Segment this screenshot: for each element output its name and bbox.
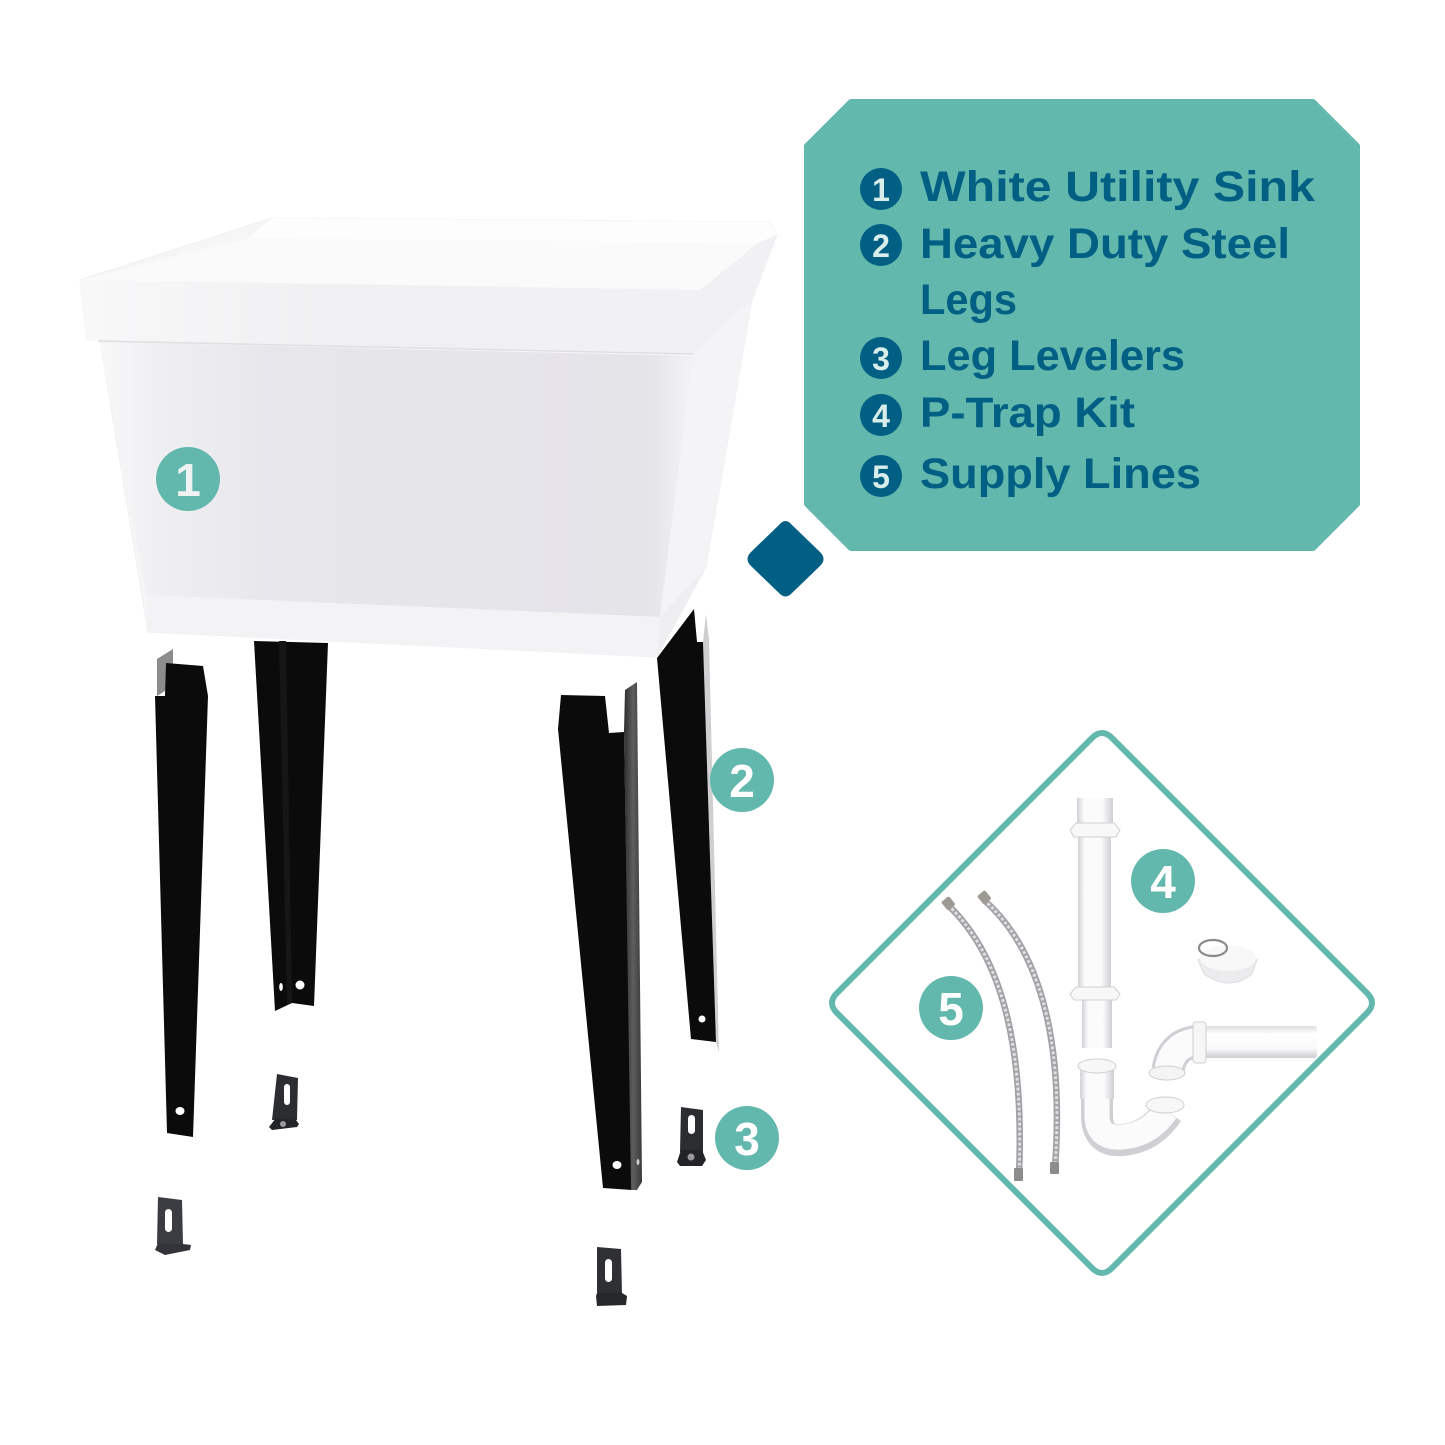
list item 5: Supply Lines bbox=[920, 450, 1201, 498]
list item 2: 2 bbox=[872, 228, 890, 264]
callout badge 2: 2 bbox=[729, 755, 755, 807]
rim shadow line bbox=[98, 341, 694, 354]
sink front face bbox=[100, 342, 693, 617]
list item 3: 3 bbox=[872, 341, 890, 377]
leveler: rear left bbox=[269, 1074, 299, 1130]
p-trap kit bbox=[1070, 798, 1317, 1140]
panel: parts list bbox=[807, 102, 1357, 548]
white utility sink bbox=[80, 218, 777, 657]
callout badge 3 bbox=[715, 1106, 779, 1170]
sink outer silhouette bbox=[80, 218, 777, 657]
callout badge 3: 3 bbox=[734, 1113, 760, 1165]
callout badge 1: 1 bbox=[175, 454, 201, 506]
list item 2: Heavy Duty Steel bbox=[920, 220, 1290, 268]
callout badge 2 bbox=[710, 748, 774, 812]
hose 1 bbox=[941, 896, 1023, 1181]
callout badge 4: 4 bbox=[1150, 856, 1176, 908]
sink right side bbox=[660, 300, 752, 617]
elbow and arm bbox=[1149, 1022, 1317, 1080]
right rim side bbox=[695, 235, 777, 353]
front rim bbox=[80, 280, 700, 353]
tailpiece bbox=[1070, 798, 1120, 1048]
leg: rear right bbox=[657, 609, 719, 1052]
leg: front right bbox=[558, 682, 642, 1190]
supply lines bbox=[941, 890, 1059, 1181]
panel background bbox=[807, 102, 1357, 548]
list item 2 bbox=[860, 220, 1290, 324]
list item 1: 1 bbox=[872, 172, 890, 208]
leg: front left bbox=[155, 649, 208, 1137]
list item 1: White Utility Sink bbox=[920, 163, 1315, 211]
sink interior bbox=[80, 238, 758, 290]
front legs of sink stand bbox=[155, 649, 642, 1190]
callout badge 4 bbox=[1131, 849, 1195, 913]
list item 2: Legs bbox=[920, 276, 1017, 324]
hose 2 bbox=[977, 890, 1059, 1174]
list item 3: Leg Levelers bbox=[920, 332, 1185, 380]
leveler: front right bbox=[596, 1247, 627, 1306]
leg: rear left bbox=[254, 641, 328, 1011]
rear legs of sink stand bbox=[254, 609, 719, 1052]
callout badge 1 bbox=[156, 447, 220, 511]
callout badge 5: 5 bbox=[938, 983, 964, 1035]
leveler: rear right bbox=[677, 1107, 706, 1166]
leveler: front left bbox=[155, 1197, 191, 1255]
list item 4: 4 bbox=[872, 398, 890, 434]
trap bend bbox=[1078, 1059, 1184, 1140]
leg levelers bbox=[155, 1074, 706, 1306]
callout badge 5 bbox=[919, 976, 983, 1040]
list item 5: 5 bbox=[872, 459, 890, 495]
icon: drain stopper bbox=[1198, 940, 1257, 983]
bottom band bbox=[146, 595, 660, 657]
rear rim bbox=[249, 218, 777, 243]
list item 4: P-Trap Kit bbox=[920, 389, 1135, 437]
icon: small blue diamond bbox=[748, 521, 824, 596]
diamond frame: plumbing kit bbox=[832, 733, 1372, 1273]
